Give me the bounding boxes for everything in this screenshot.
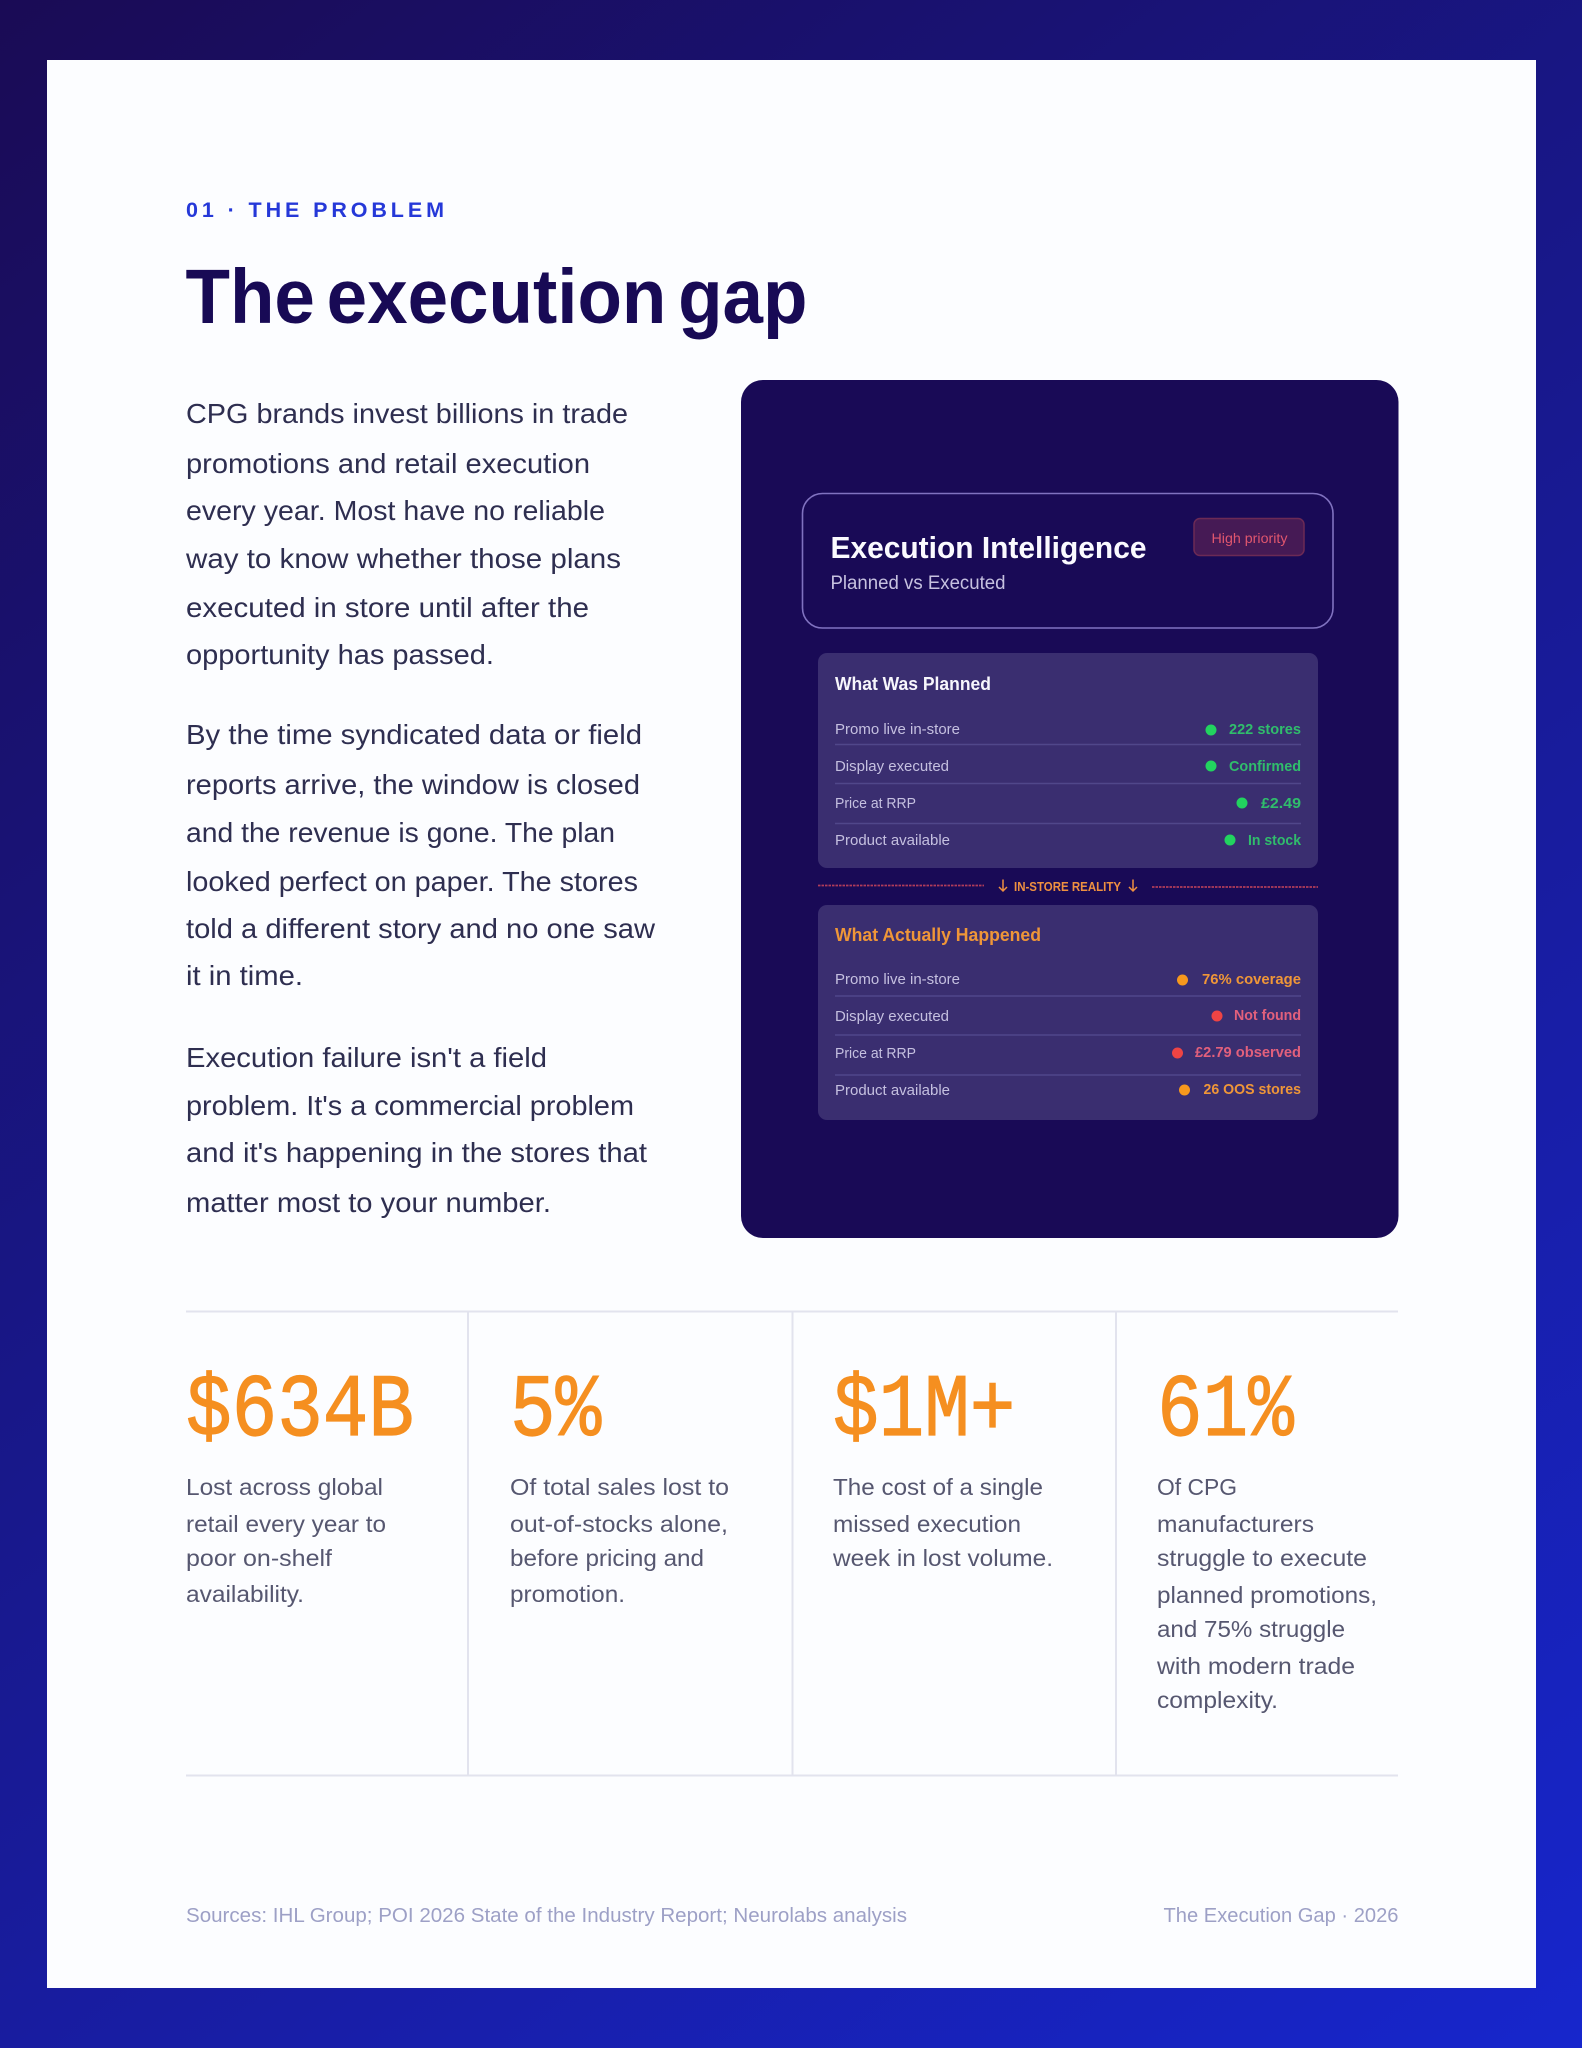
stat: 61%: with modern trade	[1156, 1653, 1355, 1679]
paragraph 3: matter most to your number.	[186, 1187, 551, 1218]
stat: 61%: planned promotions,	[1157, 1582, 1377, 1608]
stat: 634B: $634B	[186, 1361, 414, 1462]
stat: 5%: out-of-stocks alone,	[510, 1511, 728, 1537]
footer title: The Execution Gap · 2026	[1164, 1905, 1398, 1927]
stat: 634B: availability.	[186, 1581, 304, 1607]
row: product	[835, 832, 1302, 849]
row: price: Price at RRP	[835, 795, 916, 812]
paragraph 1: opportunity has passed.	[186, 639, 494, 670]
row: price result: Price at RRP	[835, 1045, 916, 1062]
title: The execution gap	[186, 254, 808, 340]
row: display: Display executed	[835, 758, 949, 775]
row: product result: Product available	[835, 1082, 950, 1099]
stat: 1M+: The cost of a single	[833, 1474, 1043, 1500]
row: price: £2.49	[1261, 795, 1301, 812]
priority badge	[1194, 518, 1304, 556]
row: display result: Not found	[1234, 1007, 1301, 1024]
row: promo: 222 stores	[1229, 721, 1301, 738]
stat: 5%: 5%	[510, 1361, 602, 1462]
stat: 61%	[1156, 1361, 1377, 1713]
row: promo result	[835, 971, 1301, 988]
card: what actually happened: What Actually Happened	[835, 925, 1041, 945]
paragraph 2: looked perfect on paper. The stores	[186, 866, 638, 897]
section label: 01 · THE PROBLEM	[186, 198, 444, 222]
paragraph 2: reports arrive, the window is closed	[186, 769, 640, 800]
stat: 5%	[510, 1361, 729, 1607]
stat: 5%: Of total sales lost to	[510, 1474, 729, 1500]
body text	[185, 398, 656, 1218]
row: price	[835, 795, 1301, 812]
row: product result	[835, 1081, 1301, 1099]
row: promo: Promo live in-store	[835, 721, 960, 738]
paragraph 3: problem. It's a commercial problem	[186, 1090, 634, 1121]
dashboard header: Planned vs Executed	[830, 573, 1006, 594]
priority badge: High priority	[1212, 530, 1288, 546]
paragraph 1	[185, 398, 628, 670]
panel: execution intelligence	[741, 380, 1398, 1238]
paragraph 1: every year. Most have no reliable	[186, 495, 605, 526]
stats row	[186, 1311, 1398, 1776]
in-store reality divider: IN-STORE REALITY	[1014, 879, 1121, 894]
row: product: Product available	[835, 832, 950, 849]
dashboard header	[802, 494, 1333, 628]
dashboard header: Execution Intelligence	[830, 530, 1146, 565]
stat: 1M+: week in lost volume.	[832, 1545, 1053, 1571]
card: what was planned	[818, 653, 1318, 868]
stat: 1M+: $1M+	[833, 1361, 1015, 1462]
stat: 1M+: missed execution	[833, 1511, 1021, 1537]
row: display	[835, 758, 1301, 775]
paragraph 2	[186, 719, 656, 991]
in-store reality divider	[818, 879, 1318, 894]
stat: 5%: promotion.	[510, 1581, 625, 1607]
stat: 634B: Lost across global	[186, 1474, 383, 1500]
paragraph 1: CPG brands invest billions in trade	[186, 398, 628, 429]
paragraph 1: promotions and retail execution	[186, 448, 590, 479]
paragraph 2: told a different story and no one saw	[186, 913, 656, 944]
row: product result: 26 OOS stores	[1204, 1081, 1301, 1098]
stat: 61%: Of CPG	[1157, 1474, 1237, 1500]
stat: 1M+	[832, 1361, 1053, 1571]
paragraph 3	[186, 1042, 647, 1218]
row: price result: £2.79 observed	[1195, 1044, 1301, 1061]
paragraph 1: way to know whether those plans	[185, 543, 621, 574]
paragraph 3: and it's happening in the stores that	[186, 1137, 647, 1168]
row: promo result: 76% coverage	[1202, 971, 1301, 988]
footer sources: Sources: IHL Group; POI 2026 State of the Industry Report; Neurolabs analysis	[186, 1905, 907, 1927]
stat: 5%: before pricing and	[510, 1545, 704, 1571]
row: promo	[835, 721, 1301, 738]
row: product: In stock	[1248, 832, 1302, 849]
stat: 61%: 61%	[1157, 1361, 1294, 1462]
stat: 61%: and 75% struggle	[1157, 1616, 1345, 1642]
paragraph 2: it in time.	[186, 960, 303, 991]
row: display result	[835, 1007, 1301, 1025]
card: what was planned: What Was Planned	[835, 674, 991, 694]
stat: 61%: manufacturers	[1157, 1511, 1314, 1537]
stat: 61%: complexity.	[1157, 1687, 1278, 1713]
paragraph 1: executed in store until after the	[186, 592, 589, 623]
row: display: Confirmed	[1229, 758, 1301, 775]
row: promo result: Promo live in-store	[835, 971, 960, 988]
row: price result	[835, 1044, 1301, 1062]
stat: 634B: poor on-shelf	[186, 1545, 333, 1571]
paragraph 2: By the time syndicated data or field	[186, 719, 642, 750]
stat: 634B: retail every year to	[186, 1511, 386, 1537]
paragraph 3: Execution failure isn't a field	[186, 1042, 547, 1073]
stat: 61%: struggle to execute	[1157, 1545, 1367, 1571]
row: display result: Display executed	[835, 1008, 949, 1025]
stat: 634B	[186, 1361, 414, 1607]
paragraph 2: and the revenue is gone. The plan	[186, 817, 615, 848]
card: what actually happened	[818, 905, 1318, 1120]
